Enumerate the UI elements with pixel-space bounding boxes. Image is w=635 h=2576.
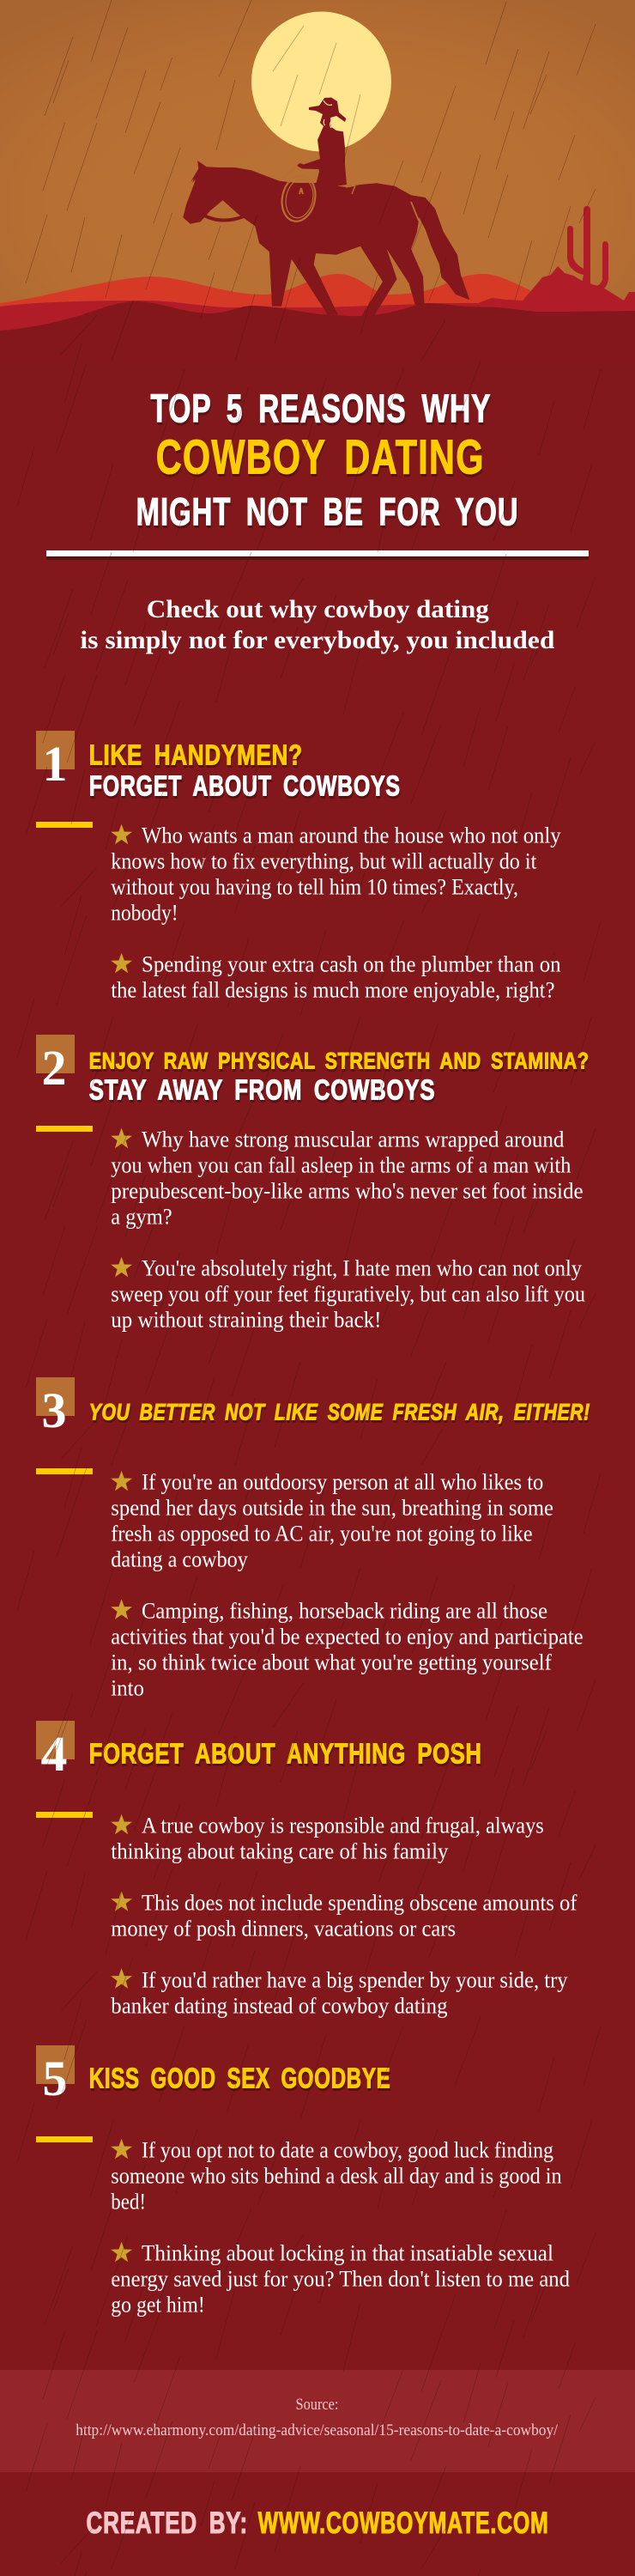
number badge 3: [36, 1377, 75, 1438]
bullet 5.1: bed!: [111, 2190, 146, 2215]
rider hat band and hair highlights: [324, 100, 332, 128]
bullet 3.1: [111, 1470, 553, 1571]
bullet 2.1: [111, 1127, 584, 1230]
bullet 1.1: [111, 823, 561, 926]
bullet 3.2: activities that you'd be expected to enjoy and participate: [111, 1624, 584, 1649]
bullet 4.2: money of posh dinners, vacations or cars: [111, 1916, 456, 1941]
bullet 4.3: If you'd rather have a big spender by your side, try: [142, 1967, 568, 1992]
accent bar: [36, 1812, 93, 1818]
sky: [0, 0, 635, 343]
number badge 2: [36, 1035, 75, 1096]
bullet 3.2: in, so think twice about what you're getting yourself: [111, 1649, 552, 1674]
bullet 5.2: [111, 2241, 570, 2318]
tail highlight: [411, 202, 419, 221]
accent bar: [36, 2136, 93, 2142]
bullet 1.2: the latest fall designs is much more enjoyable, right?: [111, 978, 555, 1003]
source url: http://www.eharmony.com/dating-advice/seasonal/15-reasons-to-date-a-cowboy/: [76, 2421, 559, 2439]
bullet 4.1: A true cowboy is responsible and frugal, always: [142, 1814, 544, 1838]
panel: reason 5: [36, 2045, 570, 2318]
bullet 2.1: you when you can fall asleep in the arms of a man with: [111, 1153, 571, 1178]
far orange hills: [0, 274, 530, 343]
hero illustration: cowboy at sunset: [0, 0, 635, 361]
panel: reason 3: [36, 1377, 590, 1700]
foreground ground: [0, 301, 635, 361]
number badge 5: [36, 2045, 75, 2106]
number badge 3: 3: [41, 1382, 67, 1438]
bullet 3.1: dating a cowboy: [111, 1546, 248, 1571]
heading 2: [89, 1048, 590, 1107]
number badge 1: [36, 731, 75, 792]
number badge 4: 4: [41, 1726, 67, 1782]
panel: reason 2: [36, 1035, 590, 1333]
panel: reason 4: [36, 1721, 578, 2018]
rider silhouette: [297, 98, 347, 189]
bullet 2.1: prepubescent-boy-like arms who's never set foot inside: [111, 1179, 584, 1204]
accent bar: [36, 822, 93, 828]
bullet 1.2: [111, 952, 561, 1003]
bullet 5.2: go get him!: [111, 2293, 205, 2318]
bullet 4.2: [111, 1890, 578, 1941]
heading 1: [89, 740, 401, 803]
bullet 2.2: sweep you off your feet figuratively, but can also lift you: [111, 1282, 585, 1307]
bullet 5.1: If you opt not to date a cowboy, good luck finding: [142, 2138, 553, 2163]
source label: Source:: [295, 2396, 338, 2414]
bullet 4.1: [111, 1814, 544, 1864]
bullet 3.1: spend her days outside in the sun, breathing in some: [111, 1495, 553, 1520]
number badge 4: [36, 1721, 75, 1782]
credit line: CREATED BY:: [86, 2506, 248, 2540]
number badge 2: 2: [41, 1040, 67, 1096]
subtitle: [80, 595, 555, 654]
subtitle: Check out why cowboy dating: [147, 595, 489, 623]
bullet 5.2: Thinking about locking in that insatiable sexual: [142, 2241, 553, 2266]
stirrup: [346, 185, 355, 194]
horse silhouette: [183, 161, 469, 318]
bullet 3.2: into: [111, 1675, 144, 1700]
bullet 4.1: thinking about taking care of his family: [111, 1839, 448, 1864]
bullet 4.2: This does not include spending obscene amounts of: [142, 1890, 578, 1915]
bullet 4.3: banker dating instead of cowboy dating: [111, 1993, 448, 2018]
bullet 1.1: Who wants a man around the house who not only: [142, 823, 561, 848]
bullet 3.2: [111, 1598, 584, 1700]
horse mane tuft: [190, 169, 199, 183]
bullet 2.2: up without straining their back!: [111, 1308, 382, 1333]
icon: cactus: [566, 206, 608, 290]
panel: source band: [0, 2370, 635, 2472]
credit line: [86, 2506, 549, 2540]
bullet 3.1: fresh as opposed to AC air, you're not going to like: [111, 1521, 533, 1546]
heading 4: FORGET ABOUT ANYTHING POSH: [89, 1738, 482, 1770]
reins: [203, 215, 244, 221]
heading 2: STAY AWAY FROM COWBOYS: [89, 1075, 435, 1107]
bullet 5.2: energy saved just for you? Then don't listen to me and: [111, 2267, 570, 2292]
title divider: [46, 550, 589, 560]
title: [136, 386, 519, 534]
sun: [251, 12, 391, 151]
accent bar: [36, 1468, 93, 1474]
subtitle: is simply not for everybody, you included: [80, 626, 555, 654]
heading 1: LIKE HANDYMEN?: [89, 740, 303, 772]
bullet 1.2: Spending your extra cash on the plumber than on: [142, 952, 561, 977]
bullet 1.1: knows how to fix everything, but will actually do it: [111, 849, 537, 874]
heading 1: FORGET ABOUT COWBOYS: [89, 771, 401, 803]
bullet 5.1: someone who sits behind a desk all day and is good in: [111, 2164, 562, 2189]
title line 2: COWBOY DATING: [156, 429, 485, 484]
panel: reason 1: [36, 731, 561, 1003]
heading 5: KISS GOOD SEX GOODBYE: [89, 2063, 390, 2095]
lasso rope: [278, 166, 319, 224]
bullet 2.1: Why have strong muscular arms wrapped around: [142, 1127, 564, 1152]
bullet 2.1: a gym?: [111, 1205, 172, 1230]
bullet 1.1: nobody!: [111, 901, 178, 926]
bullet 5.1: [111, 2138, 562, 2215]
bullet 2.2: You're absolutely right, I hate men who can not only: [142, 1256, 582, 1281]
bullet 3.2: Camping, fishing, horseback riding are all those: [142, 1598, 547, 1623]
bullet 3.1: If you're an outdoorsy person at all who likes to: [142, 1470, 543, 1495]
bullet 1.1: without you having to tell him 10 times? Exactly,: [111, 875, 518, 900]
bullet 4.3: [111, 1967, 568, 2018]
number badge 1: 1: [43, 736, 67, 792]
title line 1: TOP 5 REASONS WHY: [151, 386, 491, 431]
red desert layer and mesa: [0, 266, 635, 343]
accent bar: [36, 1126, 93, 1132]
number badge 5: 5: [43, 2050, 67, 2106]
bullet 2.2: [111, 1256, 585, 1333]
